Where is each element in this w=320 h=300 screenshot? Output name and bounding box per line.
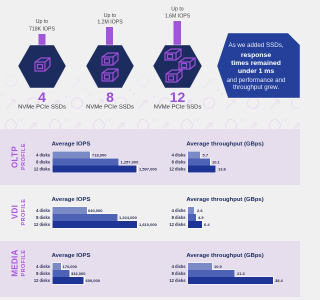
bar chart: MEDIA average throughput: 12 disks <box>169 278 186 283</box>
bar chart: OLTP average throughput: 12 disks <box>169 166 186 172</box>
IOPS label: 12 SSDs: 1.6M IOPS <box>165 13 191 19</box>
panel: VDI profile <box>0 185 300 241</box>
bar chart: OLTP average throughput: 13.8 <box>218 166 227 172</box>
bar chart: OLTP average throughput: 8 disks <box>172 160 186 164</box>
bar chart: MEDIA average throughput: 4 disks <box>172 264 186 269</box>
callout text: and performance and <box>227 77 286 84</box>
callout text: response <box>241 52 271 59</box>
profile label: OLTP: OLTP <box>10 146 19 168</box>
bar chart: OLTP average throughput: Average throughput (GBps) <box>186 142 264 148</box>
background icon pattern <box>0 64 300 129</box>
bar chart: VDI average IOPS: 640,000 <box>88 208 103 213</box>
bar chart: OLTP average IOPS: 12 disks <box>34 166 51 172</box>
callout text: As we added SSDs, <box>228 42 284 49</box>
panel: 12 SSDs <box>153 7 202 111</box>
IOPS label: 8 SSDs: Up to <box>104 13 116 19</box>
bar chart: OLTP average IOPS <box>34 142 158 173</box>
IOPS label: 12 SSDs: Up to <box>171 7 184 13</box>
bar chart: OLTP average IOPS: 1,597,000 <box>139 166 158 172</box>
bar chart: MEDIA average IOPS: Average IOPS <box>52 253 90 259</box>
bar chart: MEDIA average IOPS: 8 disks <box>36 271 51 276</box>
bar chart: VDI average throughput: 12 disks <box>169 222 186 227</box>
callout text: under 1 ms <box>238 68 274 75</box>
hexagon: 12 SSDs <box>153 45 202 88</box>
bar chart: OLTP average throughput: 10.1 <box>212 160 221 164</box>
bar chart: VDI average throughput: 6.4 <box>204 222 210 227</box>
bar chart: VDI average throughput: 4 disks <box>172 208 186 213</box>
callout text <box>227 42 286 91</box>
bar chart: VDI average IOPS: 1,224,000 <box>119 215 138 220</box>
IOPS label: 8 SSDs: 1.2M IOPS <box>97 19 123 25</box>
profile label: MEDIA: MEDIA <box>10 249 19 277</box>
IOPS bar: 12 SSDs <box>174 21 181 46</box>
bar chart: VDI average throughput: 2.6 <box>197 208 203 213</box>
bar chart: VDI average IOPS: 8 disks <box>36 215 51 220</box>
bar chart: MEDIA average IOPS: 600,000 <box>86 278 101 283</box>
icon: two drives <box>102 53 118 81</box>
bar chart: MEDIA average IOPS: 4 disks <box>36 264 51 269</box>
caption: 4 SSDs: NVMe PCIe SSDs <box>18 104 66 110</box>
profile label: VDI: PROFILE <box>21 199 27 225</box>
profile label: OLTP: PROFILE <box>21 143 27 170</box>
bar chart: OLTP average IOPS: 8 disks <box>36 160 51 164</box>
callout <box>217 33 300 98</box>
bar chart: MEDIA average IOPS: 12 disks <box>34 278 51 283</box>
bar chart: MEDIA average throughput: Average throughput (GBps) <box>186 253 264 259</box>
bar chart: OLTP average throughput <box>169 142 264 173</box>
panel: MEDIA profile <box>0 241 300 297</box>
bar chart: MEDIA average throughput: 8 disks <box>172 271 186 276</box>
callout text: times remained <box>231 60 281 67</box>
panel: 8 SSDs <box>86 13 134 110</box>
profile label: MEDIA: PROFILE <box>21 250 27 276</box>
hexagon: 8 SSDs <box>86 45 134 88</box>
bar chart: OLTP average IOPS: Average IOPS <box>52 142 90 148</box>
number: 12: 12 <box>170 89 185 105</box>
bar chart: VDI average IOPS <box>34 197 158 228</box>
bar chart: VDI average IOPS: 12 disks <box>34 222 51 227</box>
bar chart: MEDIA average throughput: 10.9 <box>214 264 223 269</box>
bar chart: OLTP average throughput: 5.7 <box>202 152 209 158</box>
bar chart: VDI average throughput <box>169 197 264 228</box>
bar chart: MEDIA average throughput: 38.4 <box>275 278 284 283</box>
profile label: MEDIA <box>10 249 27 277</box>
profile label: OLTP <box>10 143 27 170</box>
callout text: throughput grew. <box>233 84 279 91</box>
bar chart: VDI average IOPS: 1,610,000 <box>139 222 158 227</box>
bar chart: MEDIA average throughput <box>169 253 284 284</box>
number: 4: 4 <box>38 89 46 105</box>
profile label: VDI: VDI <box>10 205 19 219</box>
IOPS bar: 4 SSDs <box>38 34 46 46</box>
bar chart: VDI average IOPS: 4 disks <box>36 208 51 213</box>
bar chart: OLTP average IOPS: 718,000 <box>92 152 107 158</box>
bar chart: OLTP average IOPS: 1,257,000 <box>120 160 139 164</box>
panel: 4 SSDs <box>18 19 66 110</box>
bar chart: VDI average throughput: Average throughput (GBps) <box>186 197 264 203</box>
bar chart: MEDIA average throughput: 21.3 <box>237 271 246 276</box>
IOPS label: 4 SSDs: Up to <box>36 19 48 25</box>
bar chart: MEDIA average IOPS: 332,000 <box>71 271 86 276</box>
caption: 12 SSDs: NVMe PCIe SSDs <box>154 104 201 110</box>
profile label: VDI <box>10 199 27 225</box>
hexagon: 4 SSDs <box>18 45 66 88</box>
bar chart: VDI average throughput: 8 disks <box>172 215 186 220</box>
bar chart: VDI average IOPS: Average IOPS <box>52 197 90 203</box>
IOPS label: 4 SSDs: 718K IOPS <box>29 26 56 32</box>
icon: three drives <box>165 49 195 82</box>
IOPS bar: 8 SSDs <box>106 27 113 46</box>
panel: OLTP profile <box>0 129 300 185</box>
number: 8: 8 <box>106 89 114 105</box>
bar chart: OLTP average throughput: 4 disks <box>172 152 186 158</box>
bar chart: OLTP average IOPS: 4 disks <box>36 152 51 158</box>
bar chart: MEDIA average IOPS <box>34 253 101 284</box>
bar chart: MEDIA average IOPS: 170,000 <box>62 264 78 269</box>
icon: one drive <box>35 58 50 71</box>
caption: 8 SSDs: NVMe PCIe SSDs <box>86 104 134 110</box>
bar chart: VDI average throughput: 4.9 <box>198 215 204 220</box>
